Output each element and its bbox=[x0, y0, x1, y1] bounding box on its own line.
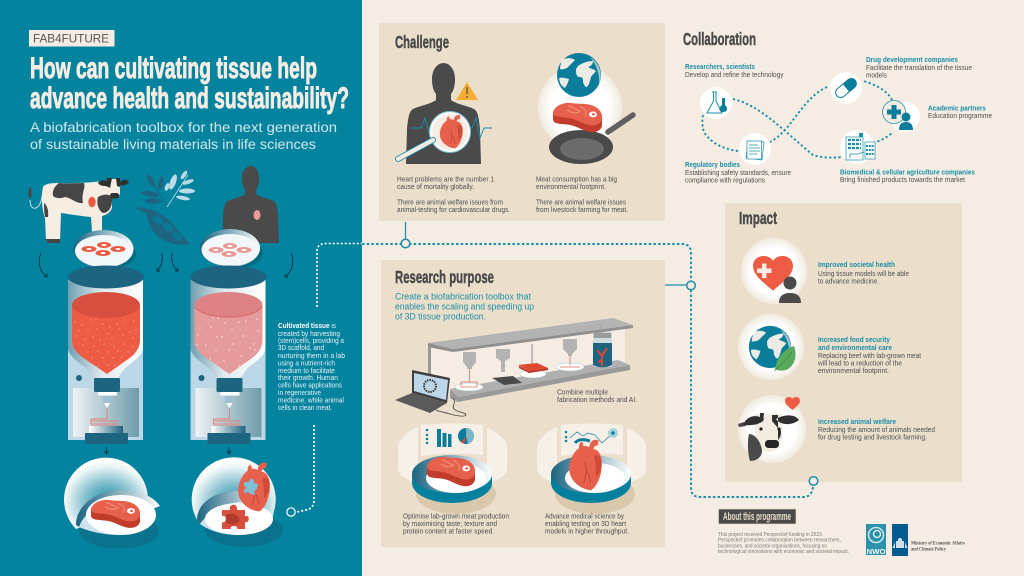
text: cultivated tissue: (stem)cells, providing a bbox=[278, 336, 345, 345]
text: societal health: to advance medicine. bbox=[818, 276, 879, 286]
subtitle: of sustainable living materials in life sciences bbox=[30, 137, 316, 152]
heading: collaboration: Collaboration bbox=[683, 29, 756, 49]
subtitle: A biofabrication toolbox for the next generation bbox=[30, 120, 337, 135]
logo: ministry: Ministry of Economic Affairs bbox=[911, 540, 965, 546]
text: societal health bbox=[818, 260, 909, 286]
text: cultivated tissue: 3D scaffold, and bbox=[278, 343, 324, 352]
icon: flask bbox=[700, 87, 732, 119]
heading: about this programme bbox=[718, 509, 796, 524]
illustration: heart testing dish bbox=[537, 424, 646, 514]
text: food security: Replacing beef with lab-grown meat bbox=[818, 351, 922, 360]
text: challenge right: environmental footprint. bbox=[536, 182, 606, 191]
text: animal welfare: for drug testing and livestock farming. bbox=[818, 432, 927, 442]
text: academic partners: Education programme bbox=[928, 111, 992, 120]
logo: ministry bbox=[892, 524, 965, 556]
heading: research purpose: Research purpose bbox=[395, 267, 494, 287]
text: academic partners: Academic partners bbox=[928, 104, 986, 112]
text: societal health: Improved societal health bbox=[818, 260, 895, 269]
heading: about this programme: About this programme bbox=[723, 511, 791, 523]
text: biomedical companies: Bring finished products towards the market bbox=[840, 175, 966, 184]
text: optimise meat bbox=[403, 512, 509, 536]
text: challenge right: There are animal welfare issues bbox=[536, 198, 626, 206]
text: researchers: Researchers, scientists bbox=[685, 62, 755, 71]
text: combine methods: fabrication methods and AI. bbox=[557, 395, 637, 404]
icon: plus and person bbox=[882, 100, 920, 132]
icon: heart and person bbox=[741, 238, 807, 304]
text: challenge left: animal-testing for cardiovascular drugs. bbox=[397, 205, 510, 214]
text: cultivated tissue: Cultivated tissue is bbox=[278, 321, 336, 330]
tag: FAB4FUTURE: FAB4FUTURE bbox=[33, 34, 109, 46]
text: research aim: Create a biofabrication toolbox that bbox=[395, 292, 531, 302]
text: research aim bbox=[395, 292, 534, 322]
text: regulatory bodies bbox=[685, 160, 791, 184]
text: food security bbox=[817, 335, 922, 375]
icon: documents bbox=[739, 133, 771, 165]
icon: human cell dish bbox=[200, 229, 263, 268]
text: drug development: models bbox=[866, 70, 887, 80]
text: about programme: technological innovations with economic and societal impact. bbox=[718, 549, 849, 555]
text: food security: and environmental care bbox=[818, 343, 892, 352]
text: cultivated tissue: their growth. Human bbox=[278, 373, 338, 382]
text: challenge right bbox=[536, 174, 628, 214]
icon: pill bbox=[830, 72, 862, 104]
logo: ministry: and Climate Policy bbox=[911, 546, 946, 552]
illustration: fabrication gantry bbox=[428, 318, 633, 402]
icon: factory buildings bbox=[840, 130, 875, 164]
text: cultivated tissue bbox=[278, 321, 345, 412]
text: advance science: enabling testing on 3D heart bbox=[545, 519, 627, 528]
text: food security: environmental footprint. bbox=[818, 366, 889, 375]
bioprinter: human tissue bbox=[190, 266, 266, 454]
text: cultivated tissue: medium to facilitate bbox=[278, 366, 335, 375]
title: How can cultivating tissue help bbox=[30, 52, 317, 85]
text: combine methods: Combine multiple bbox=[557, 388, 608, 396]
text: challenge right: from livestock farming for meat. bbox=[536, 205, 628, 214]
logo: NWO: NWO bbox=[866, 549, 886, 556]
text: combine methods bbox=[557, 388, 637, 404]
text: cultivated tissue: in regenerative bbox=[278, 388, 321, 397]
connector: dotted from left panel upward bbox=[317, 244, 362, 307]
text: food security: will lead to a reduction of the bbox=[817, 358, 902, 368]
text: about programme: This project received Perspectief funding in 2023. bbox=[718, 532, 823, 538]
text: researchers: Develop and refine the technology bbox=[685, 70, 784, 79]
icon: plant leaves bbox=[141, 170, 195, 207]
icon: human silhouette bbox=[222, 166, 279, 243]
text: challenge right: Meat consumption has a big bbox=[536, 174, 617, 184]
text: optimise meat: protein content at faster speed. bbox=[403, 526, 494, 536]
connector: dotted main teal line bbox=[362, 222, 813, 497]
text: academic partners bbox=[928, 104, 992, 120]
text: cultivated tissue: medicine, while animal bbox=[278, 396, 344, 404]
icon: cow face with heart bbox=[738, 395, 806, 463]
text: animal welfare bbox=[818, 417, 935, 442]
text: biomedical companies: Biomedical & cellular agriculture companies bbox=[840, 168, 975, 176]
connector: end circle on impact panel bbox=[809, 477, 818, 485]
text: challenge left bbox=[397, 174, 510, 214]
bioprinter: animal tissue bbox=[68, 266, 144, 454]
text: about programme bbox=[718, 532, 849, 555]
text: about programme: Perspectief promotes collaboration between researchers, bbox=[718, 538, 841, 544]
text: cultivated tissue: cells in clean meat. bbox=[278, 403, 332, 412]
text: advance science bbox=[545, 512, 629, 536]
text: research aim: enables the scaling and speeding up bbox=[395, 302, 534, 312]
text: food security: Increased food security bbox=[818, 335, 891, 344]
panel: challenge bbox=[379, 23, 665, 221]
panel: left intro bbox=[0, 0, 362, 576]
text: regulatory bodies: Regulatory bodies bbox=[685, 160, 740, 169]
subtitle bbox=[30, 120, 337, 152]
text: societal health: Using tissue models will be able bbox=[818, 269, 909, 278]
icon: pea pod bbox=[135, 207, 190, 245]
text: challenge left: cause of mortality globally. bbox=[397, 182, 474, 191]
icon: cow bbox=[28, 178, 129, 243]
panel: research purpose bbox=[381, 260, 665, 547]
arrows: into bioprinters bbox=[39, 253, 293, 277]
text: about programme: businesses, and societal organisations, focusing on bbox=[718, 544, 827, 550]
dome: cultivated steak bbox=[64, 458, 160, 548]
title bbox=[30, 52, 349, 115]
text: optimise meat: by maximising taste, texture and bbox=[403, 519, 497, 528]
heading: challenge: Challenge bbox=[395, 32, 449, 52]
text: optimise meat: Optimise lab-grown meat production bbox=[403, 512, 509, 520]
text: regulatory bodies: Establishing safety standards, ensure bbox=[685, 168, 791, 177]
text: animal welfare: Reducing the amount of animals needed bbox=[818, 425, 935, 434]
text: drug development bbox=[866, 55, 972, 80]
connector: dotted white from tissue text bbox=[287, 425, 314, 516]
icon: animal cell dish bbox=[74, 230, 136, 269]
illustration: meat optimisation dish bbox=[398, 424, 507, 514]
text: cultivated tissue: using a nutrient-rich bbox=[278, 358, 335, 368]
title: advance health and sustainability? bbox=[30, 82, 349, 115]
logo: NWO bbox=[866, 524, 886, 556]
text: advance science: models in higher throughput. bbox=[545, 526, 629, 536]
tag: FAB4FUTURE bbox=[29, 30, 114, 46]
text: challenge left: There are animal welfare issues from bbox=[397, 198, 503, 206]
diagram: dotted infinity loop bbox=[702, 81, 893, 158]
text: drug development: Drug development companies bbox=[866, 55, 958, 64]
text: research aim: of 3D tissue production. bbox=[395, 312, 486, 322]
icon: person with magnifier and heart bbox=[398, 63, 492, 164]
heading: impact: Impact bbox=[739, 208, 777, 228]
text: cultivated tissue: cells have applications bbox=[278, 380, 342, 390]
text: advance science: Advance medical science by bbox=[545, 512, 624, 520]
text: challenge left: Heart problems are the number 1 bbox=[397, 174, 494, 184]
text: cultivated tissue: created by harvesting bbox=[278, 329, 340, 338]
text: cultivated tissue: nurturing them in a lab bbox=[278, 351, 345, 360]
illustration: laptop bbox=[395, 370, 466, 416]
dome: cultivated heart and puzzle piece bbox=[192, 457, 283, 547]
text: researchers bbox=[685, 62, 784, 79]
text: biomedical companies bbox=[840, 168, 975, 184]
icon: globe and leaf bbox=[738, 314, 804, 380]
text: drug development: Facilitate the translation of the tissue bbox=[866, 63, 972, 72]
text: regulatory bodies: compliance with regulations bbox=[685, 176, 765, 184]
panel: impact bbox=[725, 203, 962, 482]
text: animal welfare: Increased animal welfare bbox=[818, 417, 896, 426]
icon: globe, steak and pan bbox=[538, 53, 633, 164]
